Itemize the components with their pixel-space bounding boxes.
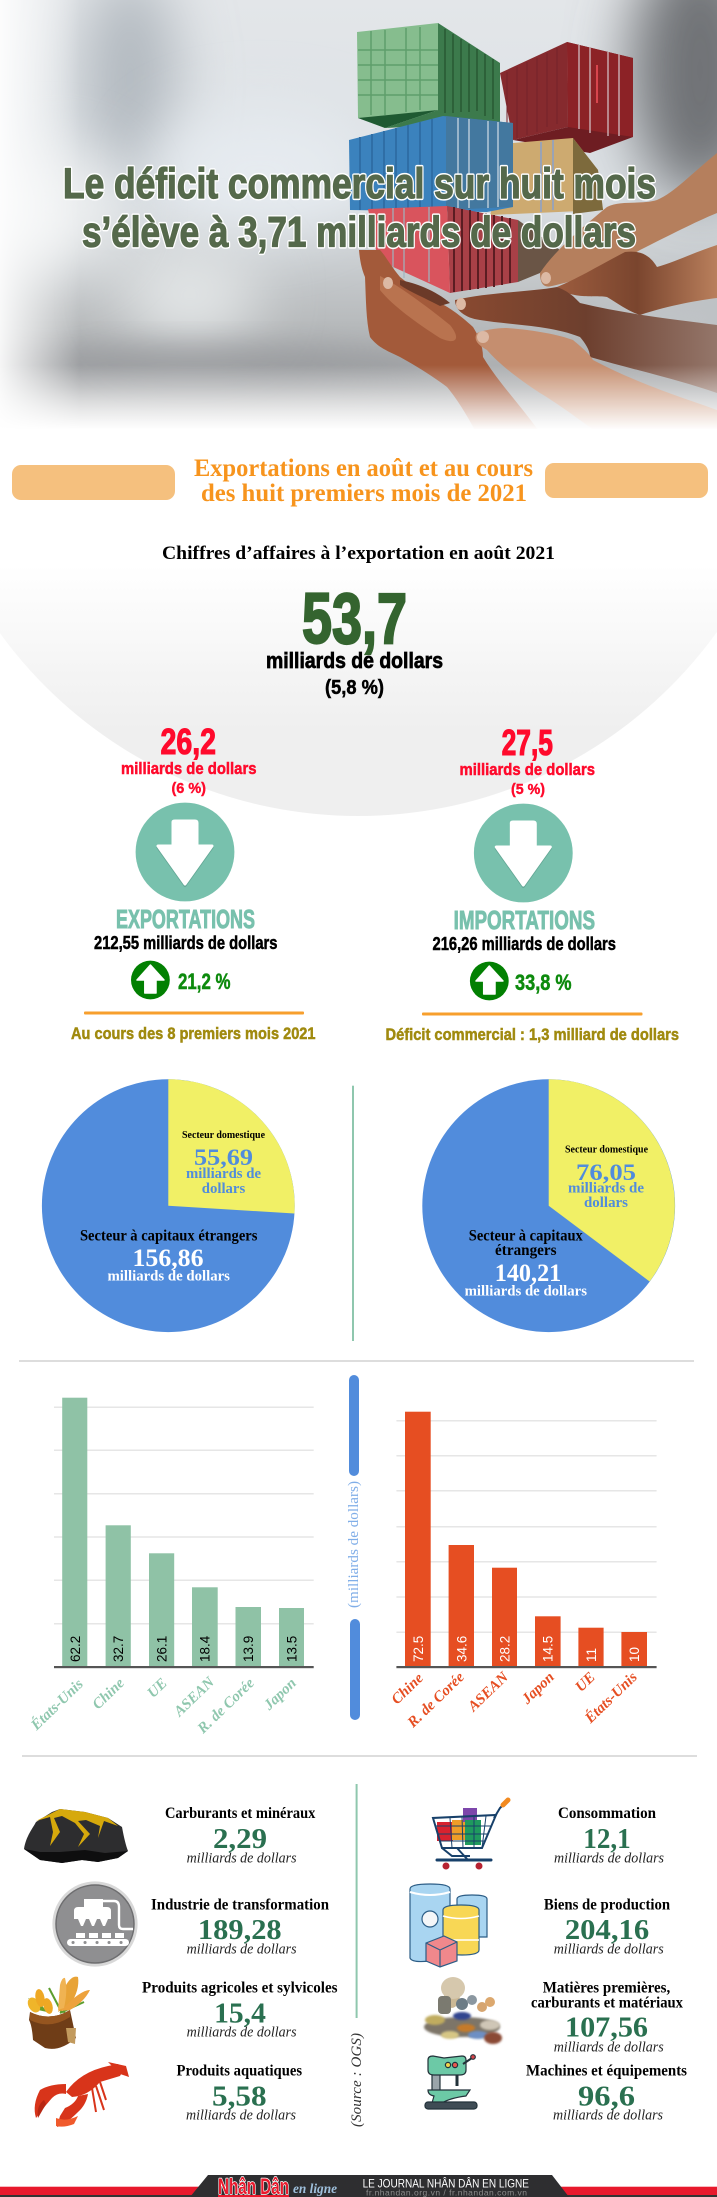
pie chart: imports by sector bbox=[422, 1079, 675, 1332]
upper right arm bbox=[540, 153, 717, 287]
category labels: R. de Corée bbox=[194, 1675, 258, 1738]
source note: (Source : OGS) bbox=[349, 2033, 365, 2127]
bar values: 26.1 bbox=[154, 1636, 170, 1662]
icon: drill press bbox=[425, 2055, 477, 2109]
item: aquatic products bbox=[35, 2062, 302, 2127]
publisher name: LE JOURNAL NHÂN DÂN EN LIGNE bbox=[363, 2175, 529, 2190]
exports decrease figure bbox=[121, 721, 256, 797]
text block: Carburants et minéraux bbox=[165, 1805, 316, 1822]
total figure bbox=[266, 580, 443, 699]
label: foreign sector: étrangers bbox=[495, 1242, 557, 1259]
text block: milliards de dollars bbox=[553, 2108, 663, 2124]
icon: up arrow bbox=[131, 961, 170, 999]
bar chart: export markets bbox=[27, 1398, 314, 1738]
item: fuels and minerals bbox=[24, 1805, 316, 1867]
bar chart: import markets bbox=[389, 1412, 657, 1732]
bar values: 28.2 bbox=[498, 1636, 512, 1662]
label: domestic sector: dollars bbox=[584, 1195, 628, 1211]
text block: Produits agricoles et sylvicoles bbox=[142, 1979, 338, 1996]
icon: shopping cart bbox=[433, 1800, 508, 1870]
icon: barrels and box bbox=[410, 1884, 487, 1967]
category labels: UE bbox=[145, 1675, 171, 1701]
imports decrease figure: 27,5 bbox=[502, 722, 553, 763]
text block: milliards de dollars bbox=[187, 1942, 297, 1958]
text block bbox=[554, 1805, 664, 1867]
bar values: 10 bbox=[627, 1647, 642, 1662]
left cupped hand bbox=[359, 250, 534, 426]
caption: Au cours des 8 premiers mois 2021 bbox=[71, 1024, 316, 1043]
bar values: 34.6 bbox=[454, 1636, 470, 1662]
category labels: États-Unis bbox=[581, 1669, 641, 1727]
bar values: 32.7 bbox=[111, 1636, 126, 1662]
third right arm bbox=[455, 287, 717, 393]
text block: Consommation bbox=[558, 1805, 656, 1822]
text block: Biens de production bbox=[544, 1896, 671, 1913]
label: domestic sector bbox=[565, 1145, 648, 1211]
icon: lobster bbox=[35, 2062, 129, 2127]
category labels: ASEAN bbox=[171, 1674, 219, 1721]
exports decrease figure: 26,2 bbox=[160, 721, 216, 762]
icon: up arrow bbox=[470, 962, 509, 1000]
banner pill: right bbox=[545, 463, 708, 498]
imports decrease figure: milliards de dollars bbox=[460, 760, 595, 779]
item: manufacturing bbox=[52, 1881, 329, 1967]
text block: milliards de dollars bbox=[187, 2025, 297, 2041]
exports decrease figure: milliards de dollars bbox=[121, 759, 256, 778]
text block: milliards de dollars bbox=[554, 2040, 664, 2056]
vertical divider bbox=[352, 1086, 354, 1341]
category labels: UE bbox=[573, 1669, 599, 1695]
category labels: Chine bbox=[389, 1670, 427, 1708]
category labels bbox=[389, 1669, 641, 1732]
imports decrease figure bbox=[460, 722, 595, 798]
panel: exports summary bbox=[71, 721, 316, 1043]
item: agricultural and forestry products bbox=[25, 1977, 338, 2049]
label: foreign sector: Secteur à capitaux étrangers bbox=[80, 1228, 257, 1245]
text block: 15,4 bbox=[214, 1999, 266, 2030]
item: production goods bbox=[410, 1884, 671, 1967]
exports label and value: EXPORTATIONS bbox=[116, 904, 255, 934]
bar values: 14.5 bbox=[540, 1636, 556, 1662]
total figure: 53,7 bbox=[302, 580, 407, 659]
container: blue bbox=[349, 116, 513, 212]
text block: 204,16 bbox=[565, 1915, 649, 1946]
vertical axis caption with blue pills bbox=[346, 1375, 362, 1720]
text block: 107,56 bbox=[565, 2013, 648, 2044]
section heading: Exportations en août et au cours bbox=[194, 455, 533, 482]
label: domestic sector: 55,69 bbox=[194, 1145, 253, 1170]
label: domestic sector bbox=[182, 1130, 265, 1197]
text block: carburants et matériaux bbox=[531, 1994, 683, 2011]
icon: down arrow in circle bbox=[136, 803, 234, 901]
icon: pile of materials bbox=[424, 1977, 502, 2044]
hero image: clouds, containers and hands bbox=[0, 0, 717, 441]
bar values: 13.5 bbox=[284, 1636, 300, 1662]
category labels: Japon bbox=[518, 1669, 558, 1708]
bar values bbox=[68, 1635, 300, 1662]
exports growth: 21,2 % bbox=[178, 969, 230, 994]
imports label and value: 216,26 milliards de dollars bbox=[432, 934, 616, 954]
icon: coal bbox=[24, 1809, 128, 1863]
category labels: États-Unis bbox=[27, 1676, 87, 1734]
text block: 189,28 bbox=[198, 1915, 282, 1946]
caption: Déficit commercial : 1,3 milliard de dollars bbox=[386, 1025, 679, 1044]
item: consumption bbox=[433, 1800, 664, 1870]
exports decrease figure: (6 %) bbox=[172, 780, 206, 797]
exports label and value: 212,55 milliards de dollars bbox=[94, 933, 278, 953]
exports label and value bbox=[94, 904, 278, 953]
text block: 12,1 bbox=[583, 1824, 631, 1855]
container: tan bbox=[490, 138, 603, 215]
label: foreign sector: milliards de dollars bbox=[465, 1284, 587, 1300]
text block: milliards de dollars bbox=[186, 2108, 296, 2124]
lower right hand bbox=[476, 328, 717, 422]
text block: Produits aquatiques bbox=[177, 2062, 302, 2079]
bar values: 72.5 bbox=[411, 1636, 426, 1662]
label: foreign sector: 140,21 bbox=[495, 1260, 561, 1287]
total figure: (5,8 %) bbox=[325, 677, 384, 699]
container: green bbox=[357, 23, 500, 128]
text block: Industrie de transformation bbox=[151, 1896, 329, 1913]
category labels: ASEAN bbox=[465, 1669, 513, 1716]
text block bbox=[177, 2062, 302, 2124]
container: red bbox=[500, 42, 633, 153]
text block: milliards de dollars bbox=[554, 1942, 664, 1958]
imports label and value bbox=[432, 905, 616, 954]
label: domestic sector: dollars bbox=[202, 1181, 245, 1197]
label: domestic sector: milliards de bbox=[186, 1166, 261, 1182]
icon: corn sack bbox=[25, 1977, 90, 2049]
label: foreign sector bbox=[80, 1228, 257, 1285]
bar values bbox=[411, 1636, 642, 1662]
vertical divider bbox=[356, 1784, 358, 2018]
label: domestic sector: Secteur domestique bbox=[182, 1130, 265, 1141]
section heading bbox=[194, 455, 533, 507]
bar values: 18.4 bbox=[198, 1635, 212, 1662]
category labels: Chine bbox=[90, 1675, 128, 1713]
label: domestic sector: 76,05 bbox=[576, 1160, 636, 1185]
subheading: Chiffres d’affaires à l’exportation en août 2021 bbox=[162, 543, 555, 564]
text block bbox=[531, 1979, 683, 2056]
text block bbox=[165, 1805, 316, 1867]
section heading: des huit premiers mois de 2021 bbox=[201, 480, 527, 507]
panel: imports summary bbox=[386, 722, 679, 1044]
text block bbox=[142, 1979, 338, 2041]
label: foreign sector bbox=[465, 1228, 587, 1300]
divider line bbox=[84, 1012, 304, 1014]
text block: Matières premières, bbox=[543, 1979, 670, 1996]
title bbox=[63, 160, 656, 256]
category labels: R. de Corée bbox=[404, 1669, 468, 1732]
label: foreign sector: milliards de dollars bbox=[107, 1269, 230, 1285]
second right arm bbox=[557, 245, 717, 315]
text block bbox=[151, 1896, 329, 1958]
imports decrease figure: (5 %) bbox=[511, 781, 545, 798]
text block bbox=[526, 2062, 687, 2124]
pie chart: exports by sector bbox=[42, 1079, 295, 1332]
footer banner bbox=[0, 2174, 717, 2197]
label: foreign sector: Secteur à capitaux bbox=[469, 1228, 583, 1245]
fingernails bbox=[383, 272, 551, 343]
bar values: 11 bbox=[584, 1648, 599, 1662]
icon: factory machine bbox=[52, 1881, 138, 1967]
text block: 5,58 bbox=[212, 2081, 267, 2112]
text block: milliards de dollars bbox=[554, 1851, 664, 1867]
item: machinery and equipment bbox=[425, 2055, 687, 2124]
divider line bbox=[422, 1012, 642, 1016]
item: raw materials bbox=[424, 1977, 683, 2056]
text block: 96,6 bbox=[578, 2081, 635, 2112]
background dome bbox=[13, 648, 704, 816]
text block: Machines et équipements bbox=[526, 2062, 687, 2079]
label: domestic sector: Secteur domestique bbox=[565, 1145, 648, 1156]
text block: 2,29 bbox=[213, 1824, 267, 1855]
container: pink bbox=[368, 206, 560, 293]
text block: milliards de dollars bbox=[187, 1851, 297, 1867]
bar values: 62.2 bbox=[68, 1636, 83, 1662]
category labels bbox=[27, 1674, 300, 1738]
logo: en ligne bbox=[293, 2182, 337, 2197]
category labels: Japon bbox=[260, 1675, 300, 1714]
label: foreign sector: 156,86 bbox=[132, 1245, 204, 1272]
vertical axis caption with blue pills: (milliards de dollars) bbox=[346, 1481, 362, 1608]
total figure: milliards de dollars bbox=[266, 648, 443, 673]
hands and forearms bbox=[359, 153, 717, 440]
text block bbox=[544, 1896, 671, 1958]
imports growth: 33,8 % bbox=[515, 970, 572, 995]
bar values: 13.9 bbox=[241, 1636, 256, 1662]
imports label and value: IMPORTATIONS bbox=[454, 905, 595, 935]
label: domestic sector: milliards de bbox=[568, 1181, 644, 1197]
banner pill: left bbox=[12, 465, 175, 500]
icon: down arrow in circle bbox=[474, 804, 573, 902]
